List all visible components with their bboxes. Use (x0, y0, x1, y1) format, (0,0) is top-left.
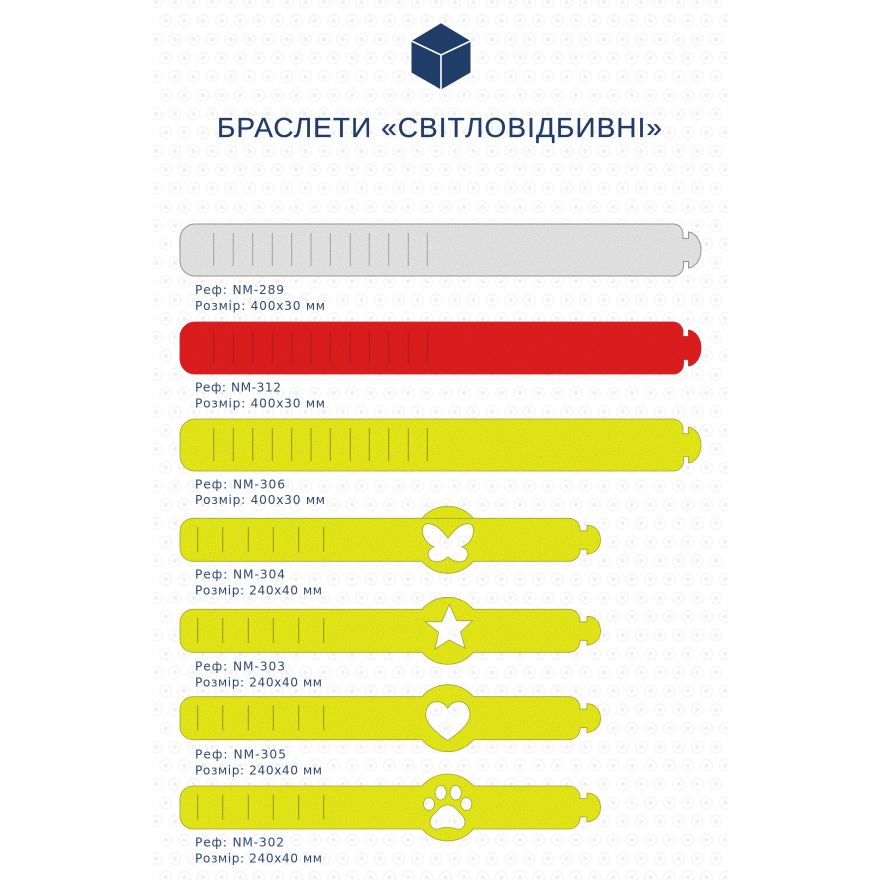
label: NM-312: Реф: NM-312 (195, 380, 281, 394)
bracelet: NM-305 heart (180, 685, 600, 752)
label: NM-306: Реф: NM-306 (195, 478, 285, 492)
label: NM-306: Розмір: 400х30 мм (195, 493, 325, 507)
bracelet: NM-312 red (180, 322, 701, 374)
bracelet: NM-304 butterfly (180, 506, 600, 573)
icon: cube logo (412, 23, 470, 89)
label: NM-304: Розмір: 240х40 мм (195, 583, 322, 597)
label: NM-303: Реф: NM-303 (195, 660, 285, 674)
label: NM-289: Реф: NM-289 (195, 283, 284, 297)
bracelet: NM-303 star (180, 597, 600, 664)
label: NM-305: Розмір: 240х40 мм (195, 763, 322, 777)
label: NM-302: Реф: NM-302 (195, 836, 284, 850)
bracelet: NM-289 silver (180, 224, 701, 276)
bracelet: NM-306 yellow (180, 419, 701, 471)
label: NM-312: Розмір: 400х30 мм (195, 396, 325, 410)
label: NM-304: Реф: NM-304 (195, 567, 285, 581)
label: NM-306 (195, 478, 325, 507)
label: NM-302: Розмір: 240х40 мм (195, 851, 322, 865)
title: БРАСЛЕТИ «СВІТЛОВІДБИВНІ» (217, 112, 662, 143)
label: NM-312 (195, 380, 325, 410)
label: NM-305 (195, 747, 322, 777)
label: NM-305: Реф: NM-305 (195, 747, 286, 761)
label: NM-289: Розмір: 400х30 мм (195, 299, 325, 313)
label: NM-303 (195, 660, 322, 690)
label: NM-302 (195, 836, 322, 865)
label: NM-289 (195, 283, 325, 313)
bracelet: NM-302 paw (180, 774, 600, 841)
label: NM-304 (195, 567, 322, 597)
label: NM-303: Розмір: 240х40 мм (195, 676, 322, 690)
